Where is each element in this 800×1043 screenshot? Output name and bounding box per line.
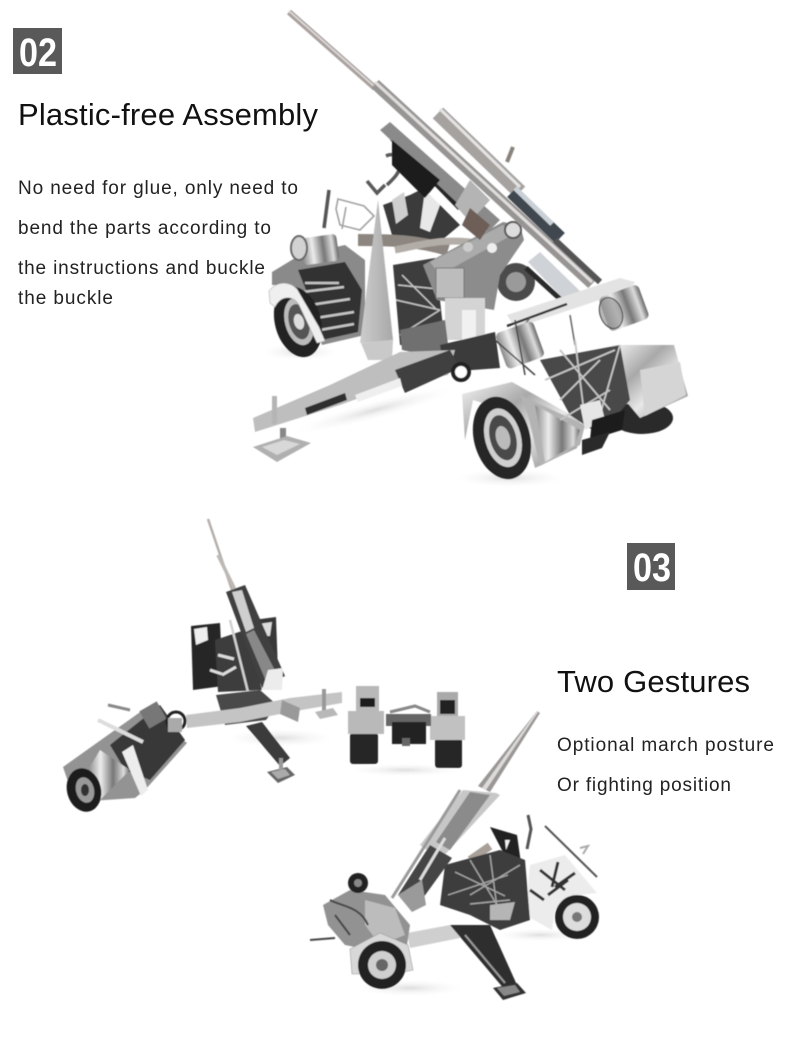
badge: 02: 02 [19,31,57,75]
wheel: truck [555,895,599,939]
horizontal trail [407,925,460,948]
left parts [323,890,410,950]
triangular shield [360,200,393,343]
trunnion arm [423,222,524,310]
mid clutter [215,630,262,692]
horizontal trail [186,689,342,728]
text block: assembly description: No need for glue, only need to [18,178,298,199]
wheel: right front [464,390,540,486]
body: left chassis [272,245,365,345]
text block: assembly description: the buckle [18,288,113,309]
hook [367,155,400,193]
emblem [453,364,469,380]
center lower block [440,332,500,372]
cylinder: centre drum [495,320,545,375]
rear tyre [611,402,673,434]
gun shields [191,623,223,690]
right front fender [462,382,580,468]
sight box [436,268,464,298]
rear carriage [348,686,465,768]
fender left [350,933,413,974]
pedestal [216,690,277,725]
fender left [269,283,325,343]
badge: 03: 03 [633,546,671,590]
heading: Two Gestures: Two Gestures [557,664,750,699]
down trail [246,722,295,783]
limber wheel [62,764,106,816]
trail [253,350,460,462]
pipes [470,846,490,860]
limber body [63,710,187,802]
cradle [390,130,470,210]
barrel tapered [478,711,540,792]
down trail [450,925,526,1000]
centre clutter [440,850,530,930]
cradle [226,585,285,688]
curved pipes [358,240,448,250]
illustration: large anti-aircraft gun model [253,11,688,488]
text block: assembly description: bend the parts according to [18,218,271,239]
text block: gestures description: Optional march posture [557,735,774,756]
frame wires upper left [336,199,374,230]
dark interior [383,190,460,250]
dark shield [490,827,522,870]
gear [497,263,535,301]
recuperator tubes [438,109,600,282]
recoil tubes [392,790,500,912]
cylinder: left drum [291,234,340,265]
text block: assembly description [18,178,298,309]
truck fender and body [525,855,597,930]
right rear fender [612,345,688,418]
frame beam [507,278,635,328]
raised barrel [208,519,240,600]
text block: gestures description: Or fighting position [557,775,731,796]
heading: Plastic-free Assembly: Plastic-free Assembly [18,97,318,132]
cylinder: right drum [595,284,650,332]
centre machinery [540,345,630,435]
barrel [289,11,592,284]
illustration: disassembled gun, limber and rear carriage [62,519,467,816]
text block: assembly description: the instructions and buckle [18,258,265,279]
text block: gestures description [557,735,774,796]
illustration: gun in fighting position [310,711,599,1000]
wheel: left [358,941,406,989]
wheel: left front [266,281,330,363]
